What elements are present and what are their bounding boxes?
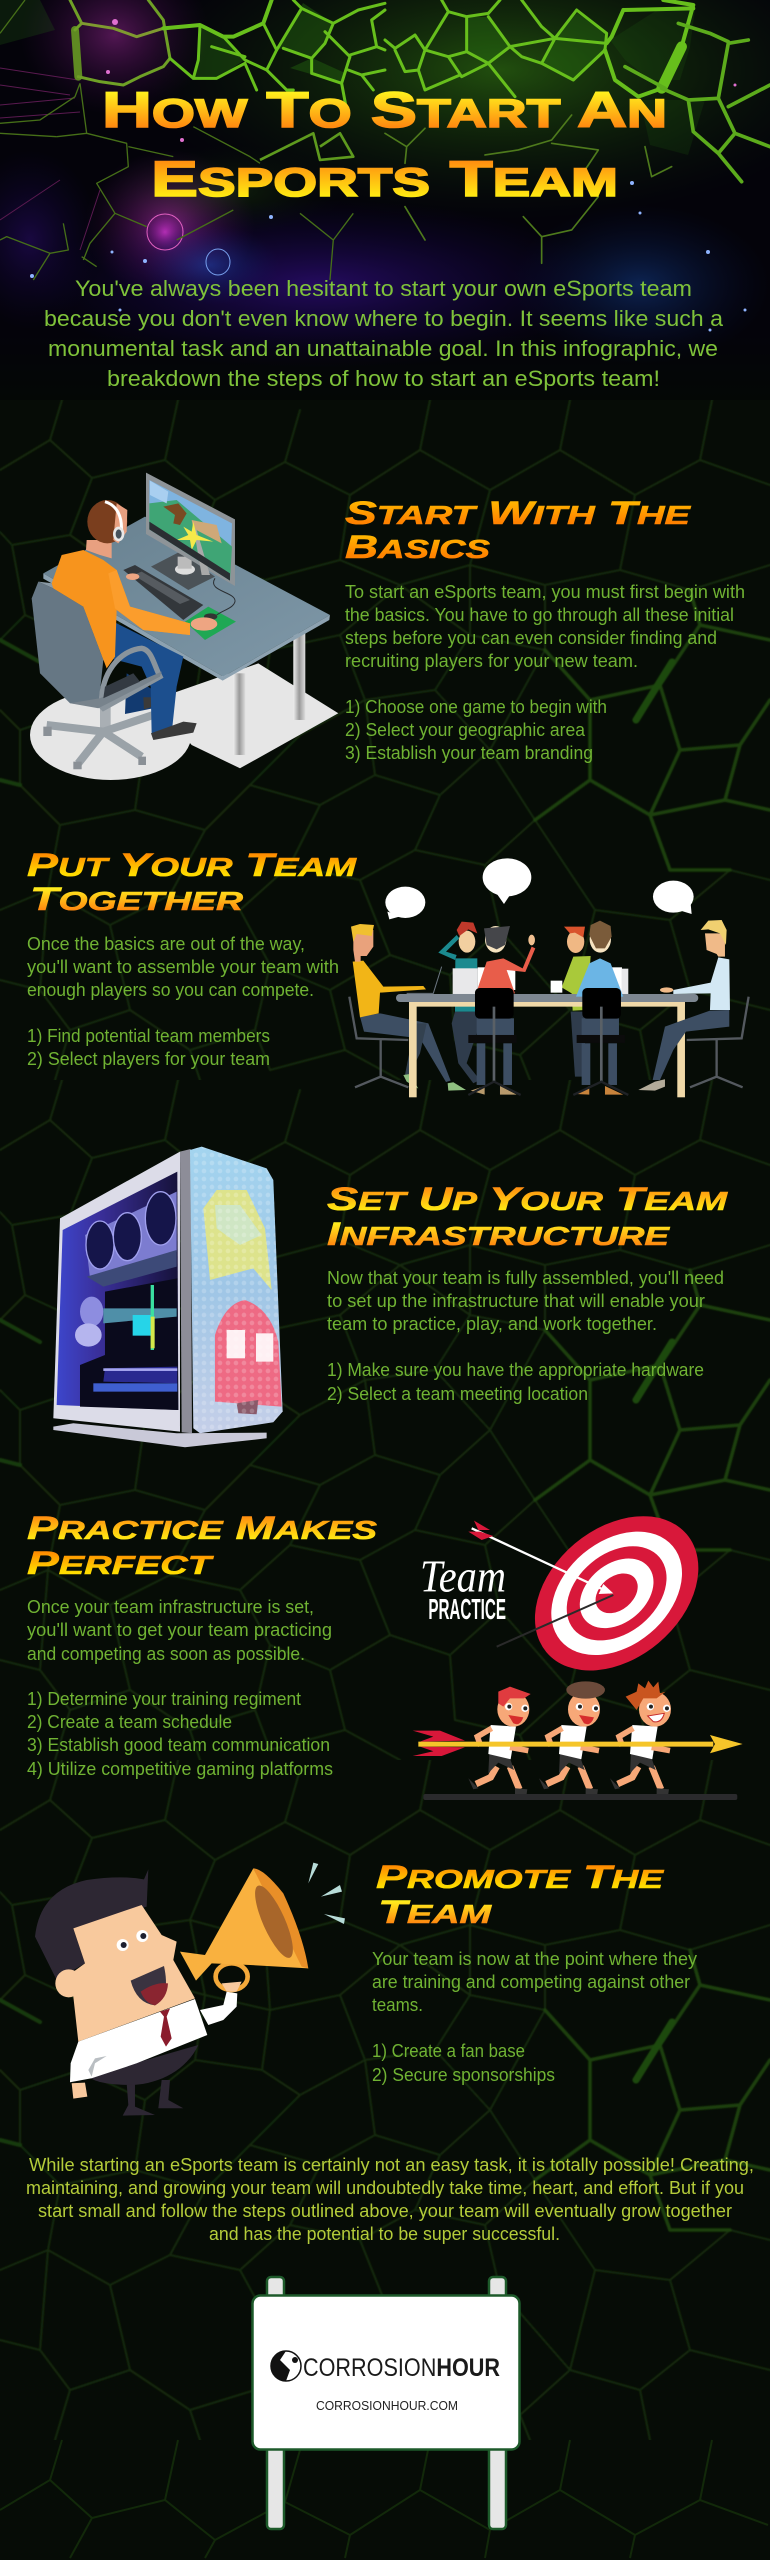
red shirt person back view [475, 947, 535, 997]
team practice label [420, 1552, 506, 1626]
heading: P ERFECT [27, 1545, 215, 1581]
section 3: set up your team infrastructure [53, 1147, 728, 1447]
body text: Once the basics are out of the way, [27, 934, 305, 954]
closing paragraph [26, 2155, 754, 2244]
steps list: 1) Create a fan base [372, 2041, 525, 2061]
steps list [327, 1360, 704, 1404]
steps list: 2) Select players for your team [27, 1049, 270, 1069]
illustration: team meeting at table [349, 858, 749, 1097]
header nebula and green mesh background [0, 0, 770, 400]
body text: the basics. You have to go through all these initial [345, 605, 734, 625]
heading [376, 1859, 664, 1930]
closing paragraph: While starting an eSports team is certainly not an easy task, it is totally possible! Creating, [29, 2155, 754, 2175]
body text: steps before you can even consider finding and [345, 628, 717, 648]
heading: P ROMOTE T HE [376, 1859, 664, 1895]
bright mesh left [70, 0, 385, 110]
heading: T OGETHER [30, 881, 244, 917]
yellow arrow [413, 1731, 743, 1756]
heading [345, 495, 691, 565]
heading [327, 1181, 728, 1252]
steps list [27, 1026, 270, 1069]
section 5: promote the team [35, 1859, 697, 2116]
mesh cell fills [0, 0, 705, 155]
sign board [252, 2296, 520, 2450]
steps list [345, 697, 607, 763]
body text: you'll want to get your team practicing [27, 1620, 332, 1640]
steps list: 2) Secure sponsorships [372, 2065, 555, 2085]
table [409, 1002, 685, 1007]
steps list: 1) Choose one game to begin with [345, 697, 607, 717]
heading [27, 847, 357, 917]
illustration: gaming PC case [53, 1147, 283, 1447]
arrow in target [468, 1521, 613, 1647]
logo wordmark: CORROSIONHOUR [303, 2354, 500, 2382]
body text: Now that your team is fully assembled, you'll need [327, 1268, 724, 1288]
body text [345, 582, 745, 671]
body text: are training and competing against other [372, 1972, 690, 1992]
heading: INFRASTRUCTURE [327, 1216, 670, 1252]
website: CORROSIONHOUR.COM [316, 2398, 458, 2413]
steps list: 3) Establish good team communication [27, 1735, 330, 1755]
speech bubbles [385, 858, 694, 919]
team practice label: PRACTICE [428, 1594, 506, 1626]
intro paragraph: You've always been hesitant to start your own eSports team [75, 276, 692, 301]
intro paragraph: monumental task and an unattainable goal. In this infographic, we [48, 336, 718, 361]
team practice label: Team [420, 1552, 506, 1602]
steps list: 2) Create a team schedule [27, 1712, 232, 1732]
steps list [372, 2041, 555, 2085]
body text: to set up the infrastructure that will enable your [327, 1291, 705, 1311]
title: H OW T O S TART A N [102, 82, 667, 138]
closing paragraph: maintaining, and growing your team will undoubtedly take time, heart, and effort. But if you [26, 2178, 744, 2198]
closing paragraph: start small and follow the steps outlined above, your team will eventually grow together [38, 2201, 732, 2221]
title: E SPORTS T EAM [151, 151, 618, 207]
target [505, 1485, 729, 1702]
body text: To start an eSports team, you must first begin with [345, 582, 745, 602]
body text [327, 1268, 724, 1334]
heading: S TART W ITH T HE [345, 495, 691, 531]
sign posts [267, 2277, 506, 2529]
steps list: 2) Select a team meeting location [327, 1384, 588, 1404]
runner 3 [610, 1681, 671, 1794]
body text: Once your team infrastructure is set, [27, 1597, 314, 1617]
teal person [452, 1012, 480, 1083]
front LED panel [190, 1147, 283, 1433]
steps list: 3) Establish your team branding [345, 743, 593, 763]
nebula specks [30, 181, 746, 332]
section 4: practice makes perfect [27, 1485, 743, 1800]
closing paragraph: and has the potential to be super successful. [209, 2224, 560, 2244]
runner 1 [468, 1687, 531, 1794]
heading: P RACTICE M AKES [27, 1510, 377, 1546]
steps list: 4) Utilize competitive gaming platforms [27, 1759, 333, 1779]
title [102, 82, 667, 207]
steps list: 1) Find potential team members [27, 1026, 270, 1046]
body text: enough players so you can compete. [27, 980, 314, 1000]
section 2: put your team together [27, 847, 749, 1097]
logo icon [271, 2351, 301, 2381]
body text: teams. [372, 1995, 423, 2015]
intro paragraph: breakdown the steps of how to start an eSports team! [107, 366, 660, 391]
body text: and competing as soon as possible. [27, 1644, 305, 1664]
steps list [27, 1689, 333, 1779]
body text: Your team is now at the point where they [372, 1949, 697, 1969]
body text: team to practice, play, and work together. [327, 1314, 657, 1334]
green person [562, 956, 591, 1011]
bright mesh right [385, 0, 770, 263]
intro paragraph [44, 276, 724, 391]
dim mesh left and lower [0, 0, 353, 280]
ground [423, 1794, 737, 1800]
body text [27, 934, 339, 1000]
left person [360, 1013, 451, 1082]
intro paragraph: because you don't even know where to begin. It seems like such a [44, 306, 724, 331]
heading: B ASICS [345, 529, 490, 565]
illustration: gamer at desk [30, 473, 338, 780]
illustration: team practice target and runners [413, 1485, 743, 1800]
steps list: 2) Select your geographic area [345, 720, 586, 740]
chairs side [349, 997, 749, 1087]
blue shirt person back view [576, 958, 623, 997]
runner 2 [539, 1681, 605, 1794]
heading [27, 1510, 377, 1581]
body text [27, 1597, 332, 1664]
steps list: 1) Make sure you have the appropriate hardware [327, 1360, 704, 1380]
heading: P UT Y OUR T EAM [27, 847, 357, 883]
signboard with logo [252, 2277, 520, 2529]
body text: recruiting players for your new team. [345, 651, 638, 671]
steps list: 1) Determine your training regiment [27, 1689, 301, 1709]
laptops [453, 967, 628, 994]
heading: T EAM [378, 1894, 492, 1930]
illustration: man with megaphone [35, 1863, 345, 2116]
body text: you'll want to assemble your team with [27, 957, 339, 977]
section 1: start with the basics [30, 473, 745, 780]
heading: S ET U P Y OUR T EAM [327, 1181, 728, 1217]
right person [653, 1010, 729, 1080]
body text [372, 1949, 697, 2015]
